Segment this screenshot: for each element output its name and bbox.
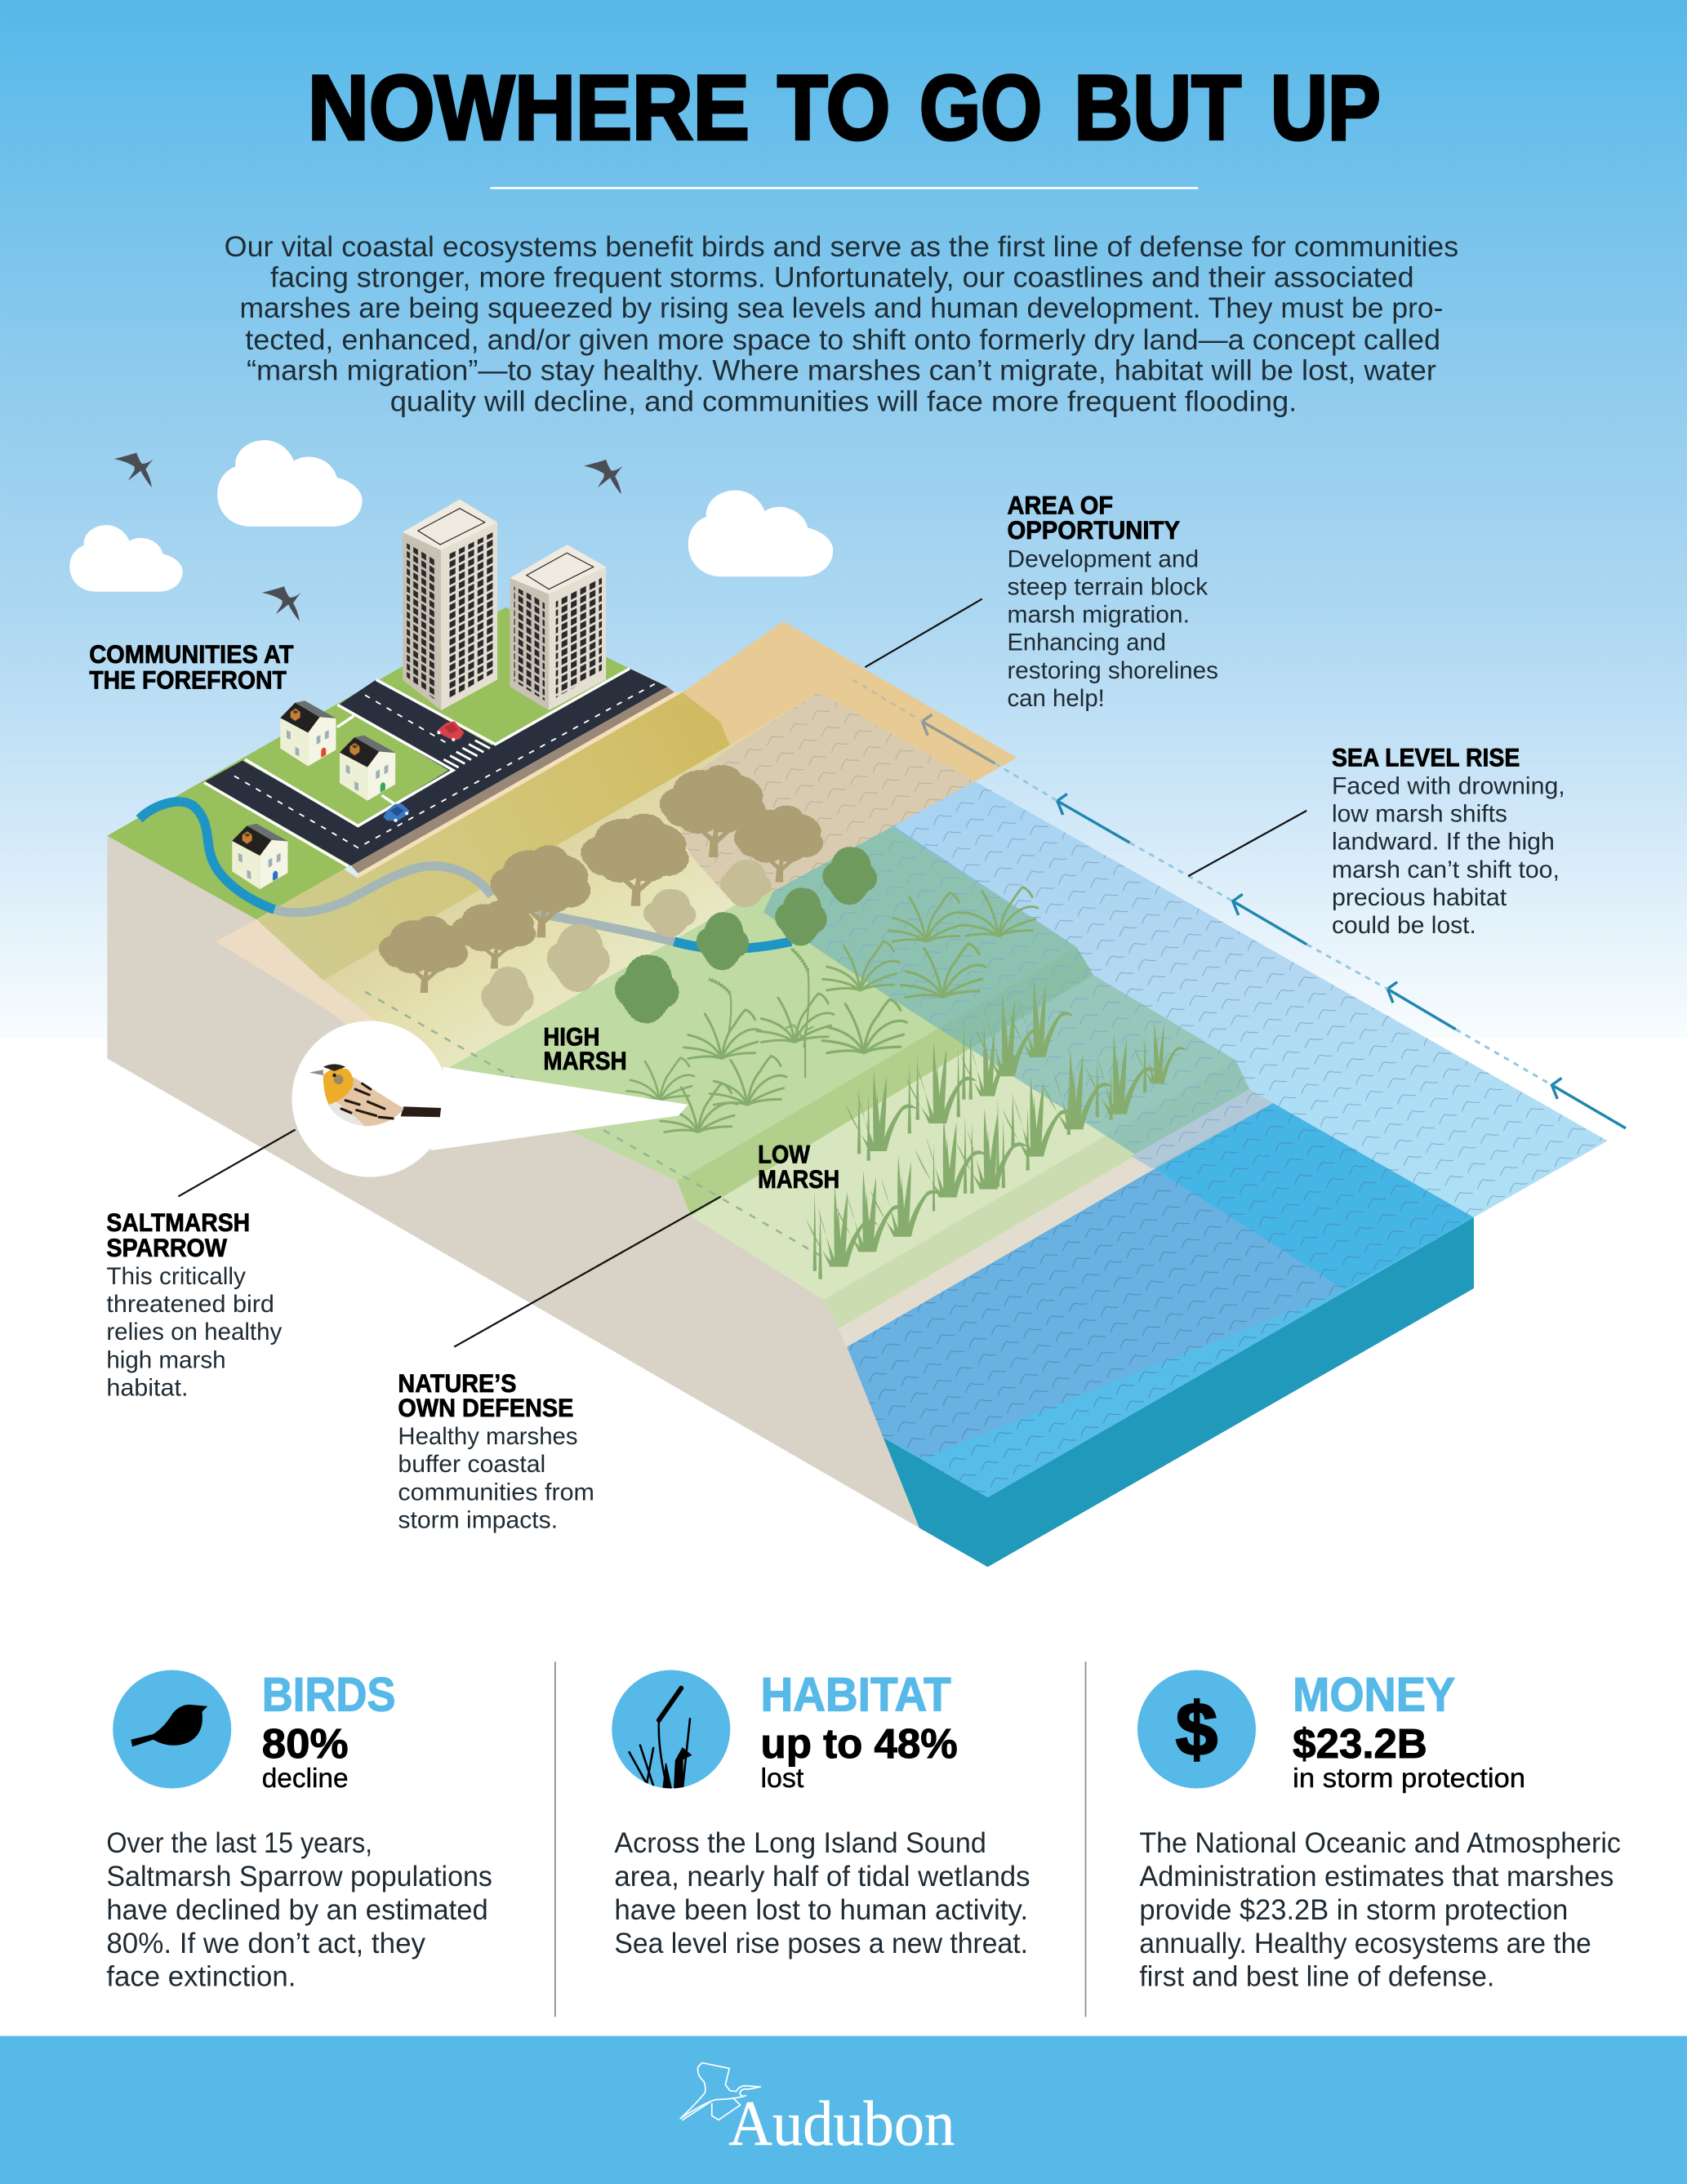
lawn paths [337,716,398,807]
label: saltmarsh sparrow: habitat. [106,1374,188,1401]
shrubs [616,848,875,1021]
title: GO [919,56,1042,159]
habitat paragraph: Across the Long Island Sound [614,1827,986,1859]
tan band at back [683,621,1017,781]
intro paragraph: marshes are being squeezed by rising sea levels and human development. They must be pro- [239,292,1443,324]
wave texture on sea [847,1103,1474,1497]
sea level overlay on sky [882,781,1608,1217]
low marsh reeds [806,978,1186,1279]
birds paragraph: 80%. If we don’t act, they [106,1928,426,1959]
label: sea level rise: landward. If the high [1332,829,1555,856]
birds paragraph: face extinction. [106,1961,296,1993]
red car [437,721,464,741]
marsh terrace band [677,947,1093,1216]
panel: habitat: HABITAT [760,1668,951,1721]
road kerbs [204,782,349,866]
label: nature's own defense: OWN DEFENSE [398,1393,573,1422]
money paragraph: annually. Healthy ecosystems are the [1139,1928,1591,1959]
label: nature's own defense: NATURE’S [398,1368,516,1398]
water surface [847,1103,1474,1497]
icon: bird [113,1670,231,1788]
label: saltmarsh sparrow: high marsh [106,1346,226,1373]
sea level arrows [852,680,1626,1128]
label: nature's own defense: buffer coastal [398,1451,545,1478]
label: saltmarsh sparrow: This critically [106,1263,246,1290]
peach overlay on earth face [216,919,443,1079]
label: area of opportunity: Enhancing and [1007,629,1166,656]
label: low marsh: MARSH [758,1164,839,1194]
panel: money [1137,1668,1621,1993]
habitat paragraph: have been lost to human activity. [614,1894,1028,1926]
label: sea level rise: low marsh shifts [1332,801,1507,828]
river to sea [674,941,791,949]
title [308,56,1381,159]
low terrace band [823,1060,1249,1329]
road dashes [230,684,655,847]
icon: dollar: $ [1176,1688,1217,1772]
gold slope [256,692,730,981]
water side wall [884,1217,1474,1567]
money paragraph: first and best line of defense. [1139,1961,1494,1993]
sparrow [309,1064,441,1126]
low marsh [691,975,1235,1300]
label: sea level rise: could be lost. [1332,912,1476,939]
label: communities: COMMUNITIES AT [89,639,293,669]
label: sea level rise: SEA LEVEL RISE [1332,742,1520,772]
overlay on flooded beach [1131,1089,1273,1168]
wave texture over shallows [763,781,1608,1217]
birds paragraph: have declined by an estimated [106,1894,488,1926]
clouds [69,440,833,592]
leader lines [178,599,1306,1347]
intro paragraph: facing stronger, more frequent storms. Unfortunately, our coastlines and their associated [270,261,1414,293]
label: sea level rise: Faced with drowning, [1332,772,1565,799]
road edge strip [351,687,674,874]
label: area of opportunity: restoring shorelines [1007,657,1218,684]
grey arrow on tan [922,714,995,763]
birds paragraph: Saltmarsh Sparrow populations [106,1861,492,1893]
panel: birds: 80% [262,1720,349,1767]
icon: heron logo [680,2063,760,2120]
birds paragraph [106,1827,492,1993]
label: saltmarsh sparrow: SPARROW [106,1233,227,1262]
river upstream [140,802,274,910]
panel: money: in storm protection [1293,1764,1525,1794]
label: sea level rise: precious habitat [1332,884,1507,911]
wordmark: Audubon [728,2088,955,2159]
leafy high marsh grasses [626,887,1038,1132]
label: low marsh: LOW [758,1140,810,1169]
label: nature's own defense: communities from [398,1479,594,1506]
panel: habitat: up to 48% [760,1720,958,1767]
label: saltmarsh sparrow [106,1208,282,1401]
money paragraph [1139,1827,1621,1993]
panel: habitat: lost [760,1764,803,1794]
sky background [0,0,1687,1038]
intro paragraph: “marsh migration”—to stay healthy. Where marshes can’t migrate, habitat will be lost, water [247,355,1436,387]
blue car [383,803,410,822]
marsh dashed line [365,992,836,1265]
panel: habitat [612,1668,1030,1959]
wave texture on tan [667,692,975,898]
trees [381,767,821,993]
title: UP [1271,56,1381,159]
footer band [0,2036,1687,2184]
label: saltmarsh sparrow: relies on healthy [106,1319,282,1346]
icon: dollar [1137,1670,1256,1788]
label: high marsh [543,1021,627,1075]
high marsh [443,822,1077,1181]
cross-section earth face [107,836,919,1528]
faded shrubs [483,861,770,1025]
label: area of opportunity: marsh migration. [1007,602,1190,629]
panel: birds: decline [262,1764,349,1794]
pale upland [323,692,975,1071]
money paragraph: Administration estimates that marshes [1139,1861,1614,1893]
sea level overlay on marsh [763,825,1273,1168]
birds paragraph: Over the last 15 years, [106,1827,372,1859]
tower two [510,545,606,710]
panel: birds: BIRDS [262,1668,396,1721]
birds flying [114,452,623,621]
label: high marsh: MARSH [543,1046,627,1075]
raised water band [847,1168,1344,1458]
crosswalk [443,741,490,767]
money paragraph: provide $23.2B in storm protection [1139,1894,1568,1926]
bright water band [1155,1103,1474,1290]
tower one [403,500,497,710]
label: nature's own defense [398,1368,594,1533]
intro paragraph: tected, enhanced, and/or given more space to shift onto formerly dry land—a concept called [245,324,1440,356]
label: saltmarsh sparrow: SALTMARSH [106,1208,250,1237]
title: NOWHERE [308,56,750,159]
label: nature's own defense: Healthy marshes [398,1423,577,1450]
intro paragraph: quality will decline, and communities will face more frequent flooding. [390,385,1297,417]
beach [839,1089,1273,1347]
isometric diagram [107,500,1608,1567]
roads [205,669,667,865]
title: BUT [1074,56,1241,159]
river through overlay [274,866,674,941]
money paragraph: The National Oceanic and Atmospheric [1139,1827,1621,1859]
sparrow callout [292,1021,688,1177]
green land top [107,607,667,919]
label: area of opportunity: Development and [1007,545,1199,572]
seed stalks [709,949,813,1078]
label: area of opportunity: AREA OF [1007,491,1113,520]
label: sea level rise [1332,742,1565,939]
label: area of opportunity: OPPORTUNITY [1007,515,1180,545]
overlay on tan terrain [667,692,975,898]
panel: money: $23.2B [1293,1720,1427,1767]
habitat paragraph [614,1827,1030,1959]
panel: birds [106,1668,492,1993]
label: communities: THE FOREFRONT [89,665,287,695]
intro paragraph [225,231,1458,417]
habitat paragraph: Sea level rise poses a new threat. [614,1928,1028,1959]
label: high marsh: HIGH [543,1021,599,1051]
label: saltmarsh sparrow: threatened bird [106,1291,274,1318]
panel: money: MONEY [1293,1668,1455,1721]
title: TO [777,56,890,159]
intro paragraph: Our vital coastal ecosystems benefit birds and serve as the first line of defense for communities [225,231,1458,263]
icon: marsh grass [612,1670,730,1788]
habitat paragraph: area, nearly half of tidal wetlands [614,1861,1030,1893]
tall reed blades [813,1021,1146,1279]
label: nature's own defense: storm impacts. [398,1506,558,1533]
label: communities [89,639,293,695]
houses [232,701,395,889]
label: area of opportunity [1007,491,1218,712]
label: sea level rise: marsh can’t shift too, [1332,856,1560,883]
label: low marsh [758,1140,839,1194]
label: area of opportunity: can help! [1007,685,1105,712]
label: area of opportunity: steep terrain block [1007,573,1208,600]
